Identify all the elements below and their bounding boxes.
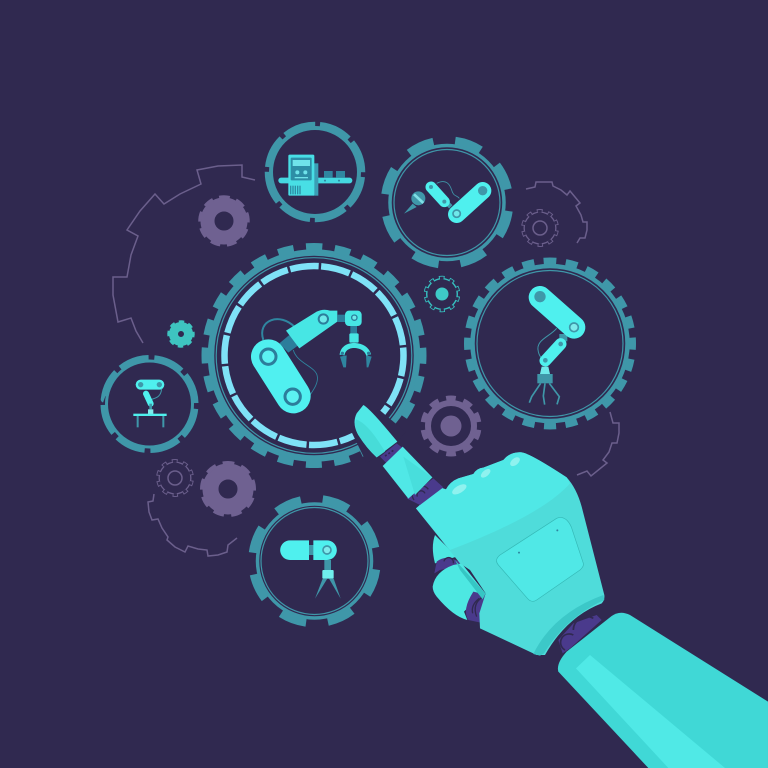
knuckle highlights: [451, 455, 521, 497]
purple gear: lower right with centre dot: [419, 394, 483, 458]
wrist joint: [544, 602, 602, 653]
outline arc: top right gear: [526, 182, 587, 243]
purple gear: top left: [196, 193, 252, 249]
icon: robot over table: [133, 382, 167, 427]
icon: gripper robot: [280, 540, 341, 599]
teal small gear: [167, 320, 195, 348]
main gear: [198, 240, 430, 471]
outline gear: top right: [520, 208, 560, 248]
palm: [416, 452, 604, 656]
gear: drill robot: [377, 132, 517, 273]
gear: bottom robot: [244, 491, 385, 631]
main robot arm: [261, 310, 372, 404]
icon: drill robot arm: [404, 182, 487, 217]
gear: left small robot: [99, 354, 200, 454]
outline arc: bottom right gear: [577, 412, 619, 476]
icon: conveyor machine: [278, 155, 352, 196]
purple gear: bottom left: [198, 459, 258, 519]
forearm: [558, 613, 768, 768]
index finger: [355, 405, 443, 505]
outline gear: teal centre: [423, 275, 461, 313]
icon: hanging robot arm: [529, 291, 578, 405]
robot hand and arm: [355, 405, 768, 768]
outline gear: bottom left: [155, 458, 195, 498]
back panel: [497, 517, 583, 601]
thumb: [433, 535, 487, 623]
outline arc: bottom left large gear: [148, 494, 237, 556]
gear: conveyor machine: [264, 121, 366, 223]
outline arc: top left large gear: [113, 165, 255, 343]
gear: right robot: [462, 255, 638, 432]
